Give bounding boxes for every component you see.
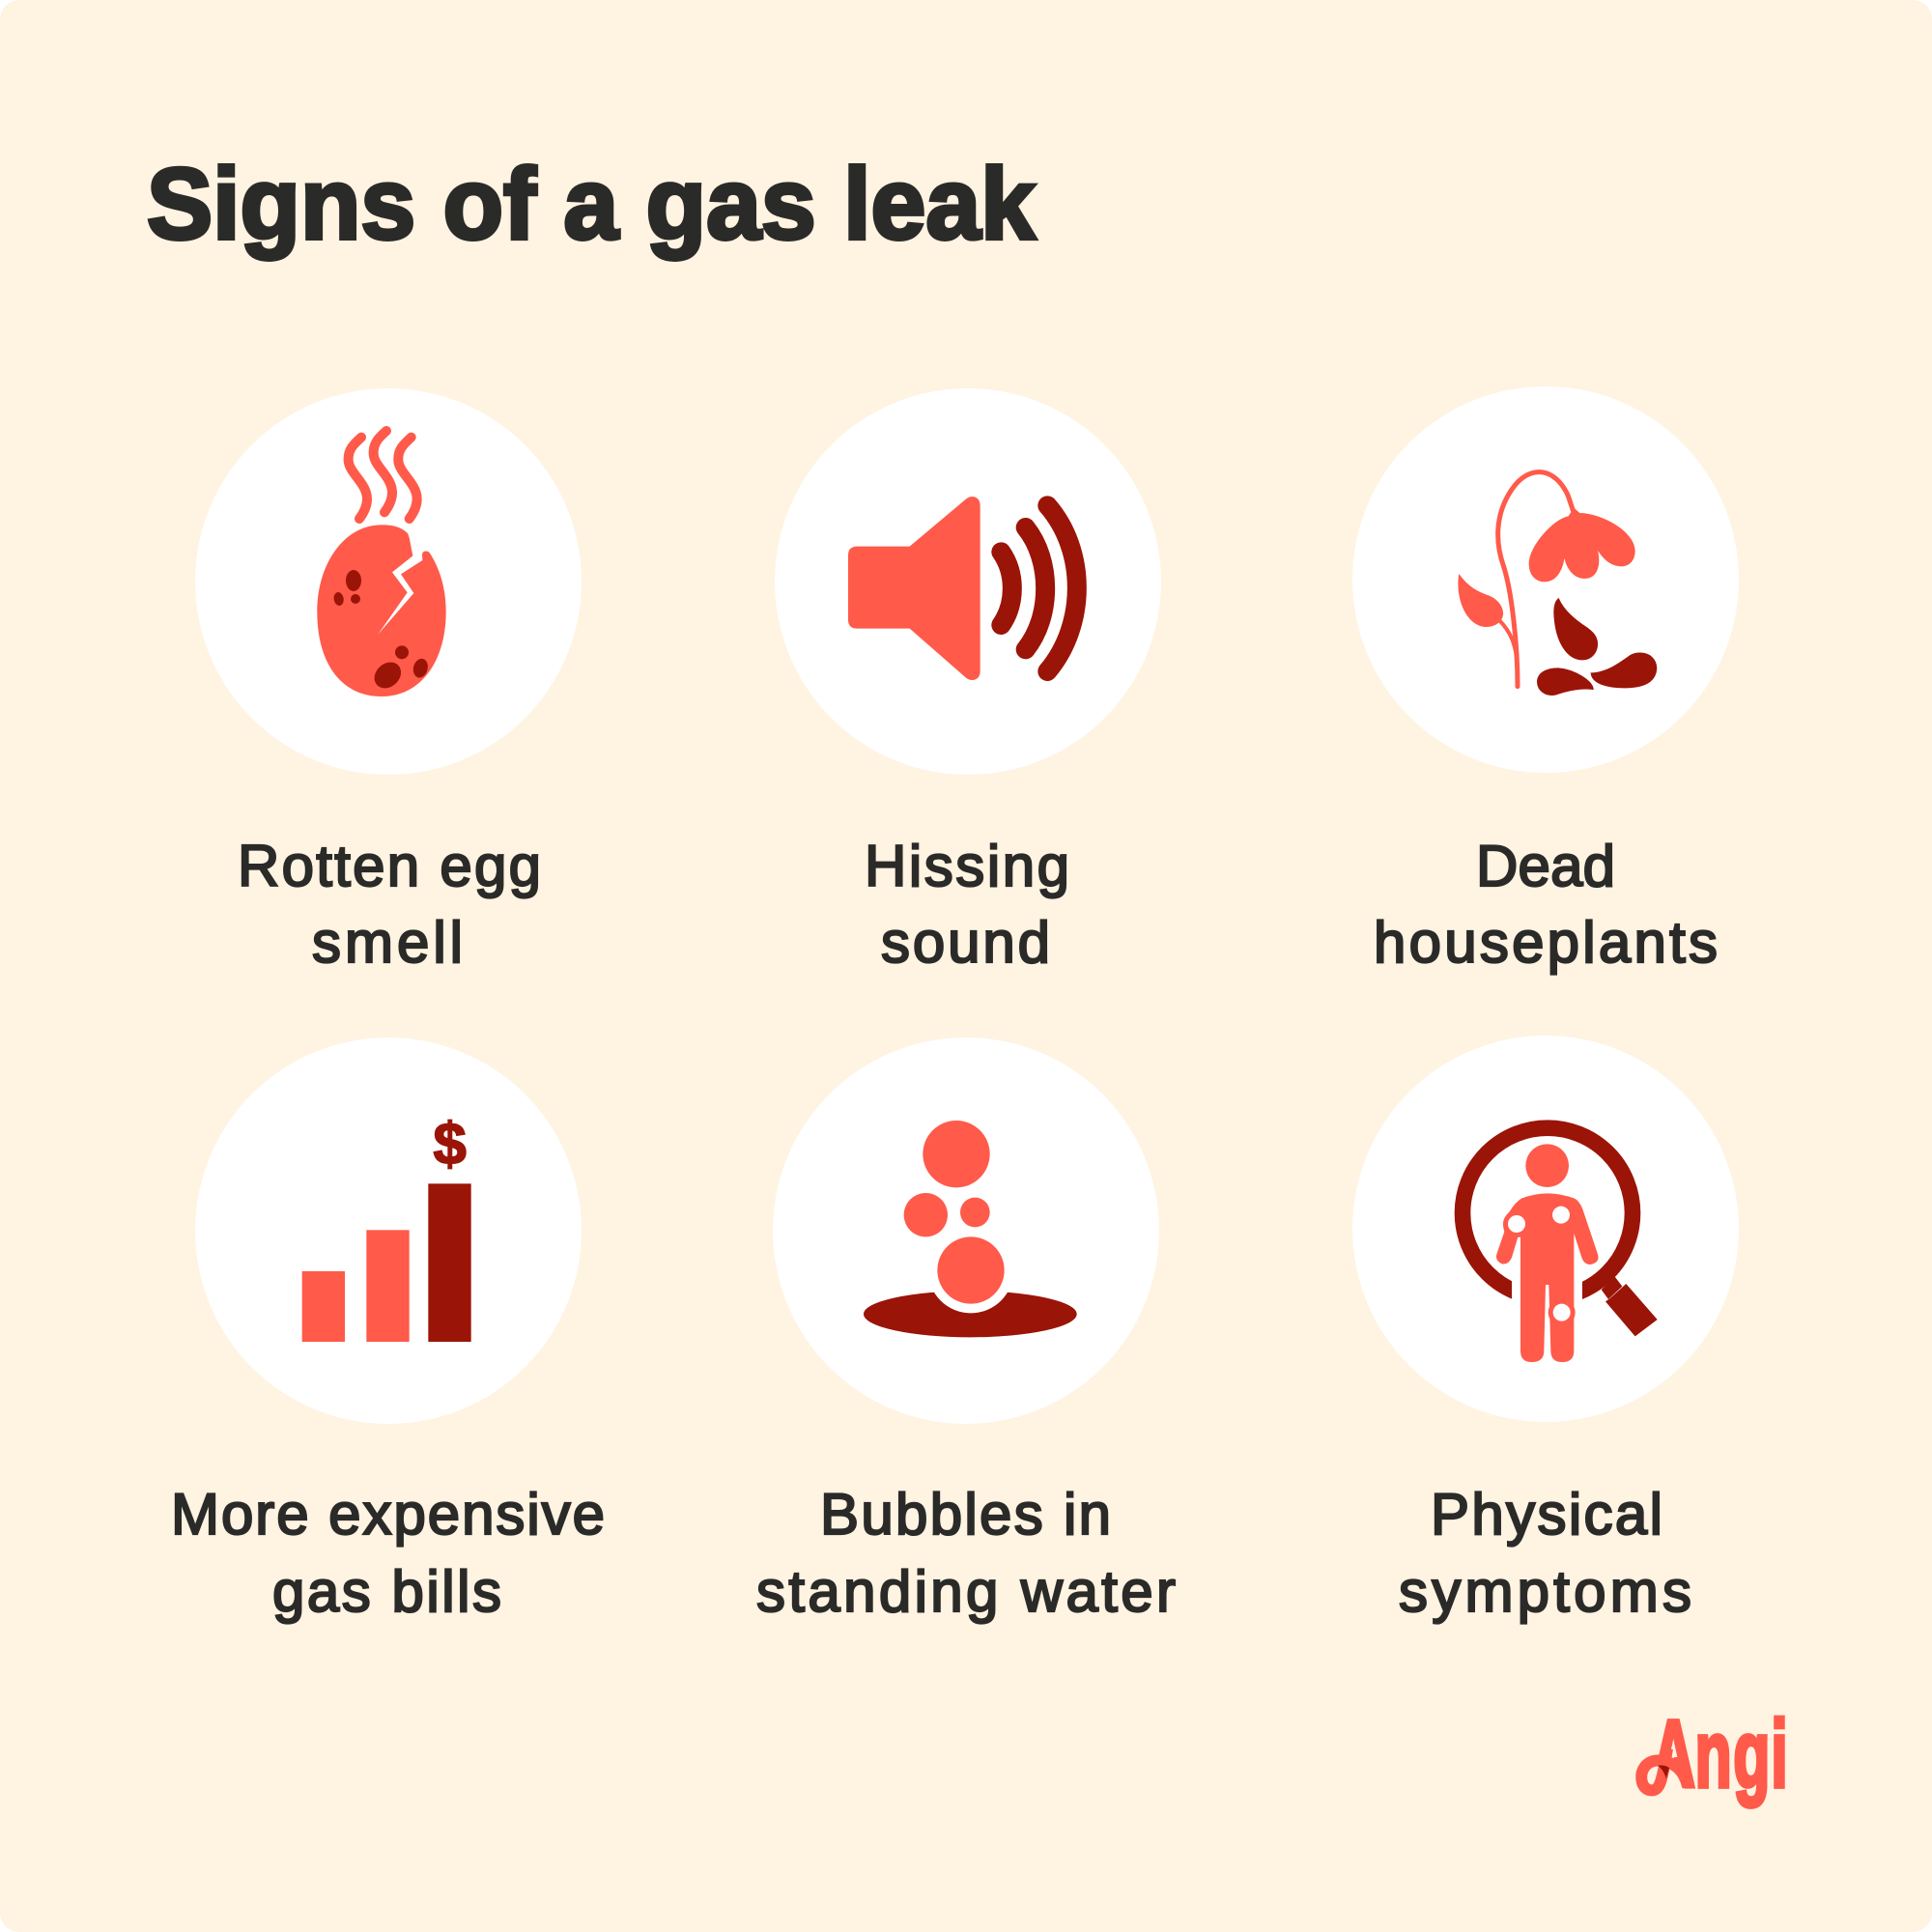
label: rotten egg smell: Rotten egg	[238, 834, 541, 898]
label: physical symptoms: Physical	[1431, 1482, 1662, 1547]
label: dead houseplants: houseplants	[1374, 910, 1718, 975]
icon: rising bar chart with dollar sign	[302, 1111, 471, 1342]
label: bubbles in standing water: Bubbles in	[820, 1482, 1111, 1547]
label: hissing sound: sound	[881, 910, 1050, 975]
panel: more expensive gas bills	[171, 1037, 605, 1624]
label: rotten egg smell	[238, 834, 541, 975]
logo: Angi: Angi	[1652, 1702, 1788, 1807]
label: more expensive gas bills: gas bills	[272, 1559, 501, 1624]
label: hissing sound: Hissing	[865, 834, 1069, 898]
label: physical symptoms	[1399, 1482, 1691, 1624]
icon: cracked rotten egg	[317, 431, 446, 696]
panel: rotten egg smell	[195, 388, 582, 975]
panel: bubbles in standing water	[756, 1037, 1176, 1624]
title: Signs of a gas leak	[147, 148, 1037, 261]
label: physical symptoms: symptoms	[1399, 1559, 1691, 1624]
icon: bubbles rising from a puddle	[864, 1121, 1077, 1337]
label: more expensive gas bills	[171, 1482, 605, 1624]
icon: person under magnifying glass	[1463, 1128, 1658, 1362]
label: dead houseplants	[1374, 834, 1718, 975]
icon: wilted flower with fallen petals	[1459, 472, 1657, 695]
label: bubbles in standing water	[756, 1482, 1176, 1624]
panel: hissing sound	[775, 388, 1161, 975]
icon: speaker with sound waves	[848, 497, 1077, 680]
panel: physical symptoms	[1352, 1036, 1739, 1624]
label: bubbles in standing water: standing water	[756, 1559, 1176, 1624]
label: hissing sound	[865, 834, 1069, 975]
panel: dead houseplants	[1352, 386, 1739, 975]
label: more expensive gas bills: More expensive	[171, 1482, 605, 1547]
label: dead houseplants: Dead	[1476, 834, 1615, 898]
icon: rising bar chart with dollar sign: $	[434, 1111, 467, 1178]
label: rotten egg smell: smell	[312, 910, 463, 975]
